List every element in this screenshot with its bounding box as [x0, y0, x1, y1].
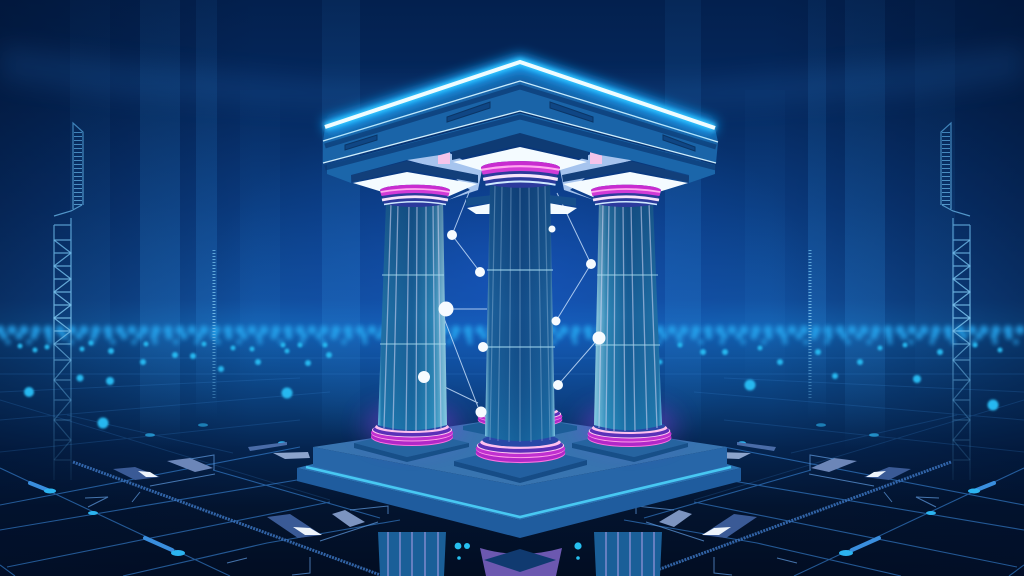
left pillar shaft: [378, 203, 447, 430]
network links: [424, 190, 599, 407]
white trim lines: [323, 81, 718, 163]
roof vent slots: [345, 102, 695, 151]
left pillar base plate: [354, 429, 469, 457]
front pillar bands: [485, 270, 555, 347]
plinth lower tier: [297, 468, 741, 538]
plinth: [297, 416, 741, 538]
left pillar base plate side: [354, 443, 469, 462]
floor: right half mirrored: [504, 358, 1024, 576]
right pillar bands: [595, 275, 660, 345]
chip strip diagonal: [73, 462, 383, 576]
right pillar shaft: [594, 203, 662, 430]
back beam: [466, 192, 576, 206]
plinth top surface: [313, 416, 727, 486]
front pillar flutes: [490, 185, 550, 442]
left pillar capital: [380, 185, 450, 207]
left pillar rings: [371, 419, 453, 446]
back pillar: [463, 200, 577, 442]
lower fascia: [327, 113, 715, 183]
floor dots: [18, 340, 1002, 428]
front pillar capital: [481, 161, 560, 188]
front pillar base plate side: [454, 460, 587, 483]
streak tips: [44, 423, 286, 556]
right pillar rings: [588, 420, 671, 447]
pink corner posts: [438, 148, 602, 164]
front pillar rings: [476, 434, 565, 463]
faint far grid: [0, 358, 520, 500]
white glowing panels: [353, 172, 477, 202]
right pillar: [572, 185, 688, 462]
neon roof edge: [325, 62, 715, 128]
vertical light beams: [70, 0, 955, 450]
floor brackets: [85, 455, 388, 575]
back soffit: [467, 198, 577, 214]
front pillar base plate: [454, 444, 587, 478]
left pillar bands: [380, 275, 446, 344]
plinth upper tier side: [313, 447, 727, 516]
lattice tower: right: [810, 123, 970, 480]
network nodes: [418, 226, 606, 418]
chip clusters: [113, 442, 365, 538]
plinth neon edge: [306, 467, 731, 517]
neon roof edge glow: [325, 62, 715, 128]
plinth ledge: [297, 464, 741, 520]
entablature: [323, 62, 718, 214]
right pillar capital: [591, 185, 661, 207]
floor streaks: [30, 483, 172, 550]
soffit beams: [351, 161, 478, 183]
neon roof edge halo: [325, 62, 715, 128]
floor: left half: [0, 358, 520, 576]
lattice tower: left: [54, 123, 214, 480]
middle fascia: [323, 81, 718, 163]
underside light panels: [407, 148, 482, 200]
left pillar: [354, 185, 469, 462]
front pillar: [454, 161, 587, 483]
near grid lines: [0, 447, 400, 576]
right pillar flutes: [599, 203, 657, 431]
right pillar base plate side: [572, 443, 688, 462]
right pillar base plate: [572, 429, 688, 457]
top face: [323, 63, 718, 142]
magenta glow around feet: [364, 405, 677, 445]
left pillar flutes: [384, 203, 441, 431]
front pillar shaft: [485, 185, 555, 441]
pillar reflections in floor: [378, 532, 662, 576]
fascia shadows: [325, 87, 716, 168]
far horizon dots: [0, 330, 1024, 342]
